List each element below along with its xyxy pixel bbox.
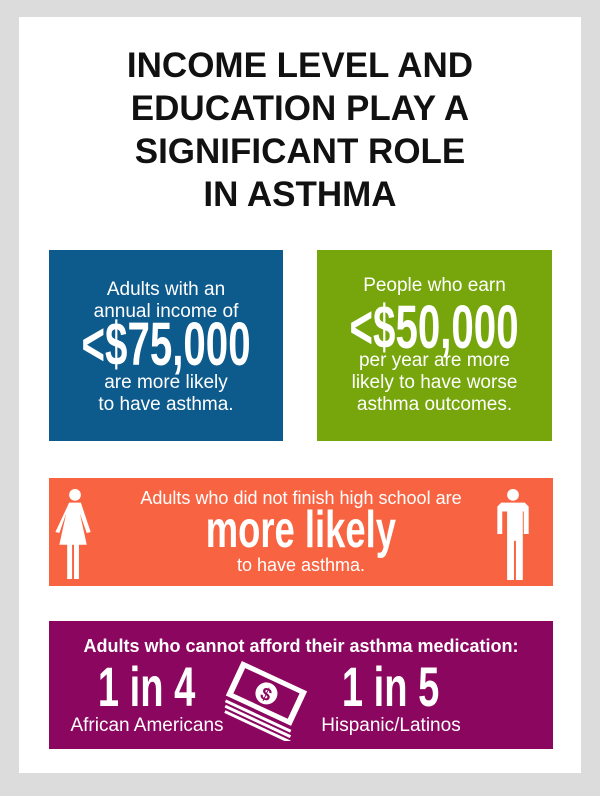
panel: income 75000 xyxy=(49,250,283,441)
panel: income 50000: per year are more xyxy=(359,350,510,371)
stat: 1 in 4: 1 in 4 xyxy=(98,655,196,718)
stat: 1 in 5 xyxy=(321,655,461,736)
panel: education: Adults who did not finish high school are xyxy=(140,488,462,508)
stat: 1 in 5: Hispanic/Latinos xyxy=(321,715,461,736)
stat: 1 in 5: 1 in 5 xyxy=(342,655,440,718)
stat: more likely: more likely xyxy=(206,501,396,559)
panel: education: to have asthma. xyxy=(237,555,365,575)
icon: woman xyxy=(56,489,91,579)
title xyxy=(127,46,473,214)
panel: income 75000: to have asthma. xyxy=(98,394,234,415)
panel: income 75000: Adults with an xyxy=(107,279,225,300)
icon: money: $ xyxy=(257,683,275,706)
icon: man xyxy=(497,489,529,580)
panel: income 50000: likely to have worse xyxy=(352,372,517,393)
stat: 50000: <$50,000 xyxy=(350,293,519,361)
title: INCOME LEVEL AND xyxy=(127,46,473,85)
stat: 75000: <$75,000 xyxy=(81,310,251,378)
stat: 1 in 4: African Americans xyxy=(70,715,224,736)
stat: 1 in 4 xyxy=(70,655,224,736)
panel: medication xyxy=(49,621,553,749)
title: EDUCATION PLAY A xyxy=(131,89,469,128)
panel: medication: Adults who cannot afford their asthma medication: xyxy=(83,636,519,656)
panel: income 50000: asthma outcomes. xyxy=(357,394,512,415)
panel: income 50000: People who earn xyxy=(363,275,506,296)
title: IN ASTHMA xyxy=(203,175,397,214)
panel: education xyxy=(49,478,553,586)
panel: income 50000 xyxy=(317,250,552,441)
title: SIGNIFICANT ROLE xyxy=(135,132,465,171)
panel: income 75000: are more likely xyxy=(104,372,228,393)
panel: income 75000: annual income of xyxy=(94,301,238,322)
icon: money xyxy=(224,661,308,741)
